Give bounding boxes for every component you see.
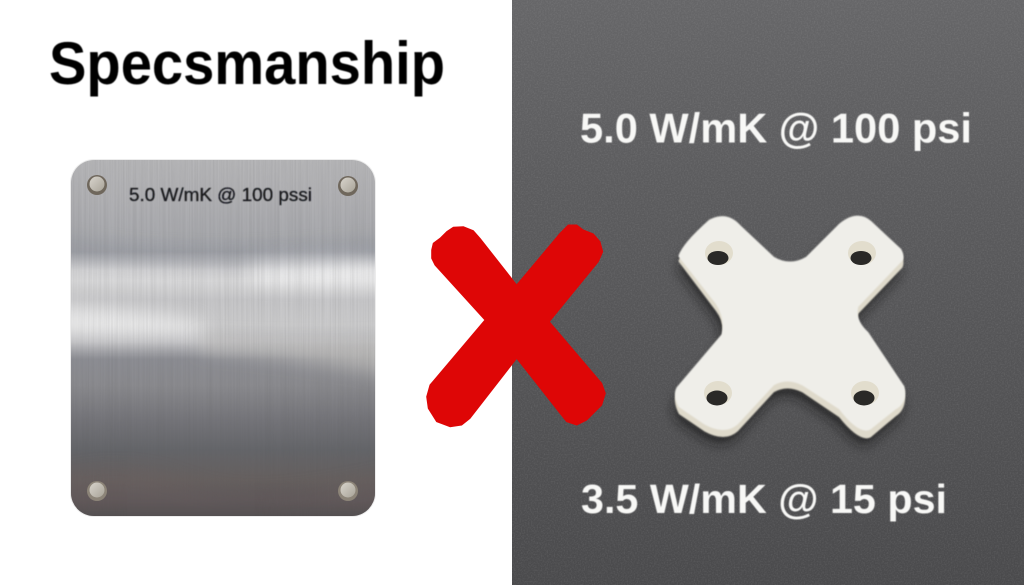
icon: white cross shaped thermal pad xyxy=(674,217,904,445)
icon: rivet bottom right xyxy=(338,481,358,501)
pad hole bottom right xyxy=(851,381,879,406)
panel: right dark textured background xyxy=(512,0,1024,585)
icon: rivet bottom left xyxy=(87,481,107,501)
title: Specsmanship xyxy=(49,30,445,97)
panel: left white background xyxy=(0,0,512,585)
icon: red X mark xyxy=(427,225,605,427)
icon: rivet top left xyxy=(87,175,107,195)
pad hole bottom left xyxy=(704,381,732,406)
icon: rivet top right xyxy=(338,176,358,196)
heading: claimed spec: 5.0 W/mK @ 100 psi xyxy=(580,104,972,152)
pad hole top left xyxy=(705,241,733,265)
pad hole top right xyxy=(848,241,876,265)
heading: real spec: 3.5 W/mK @ 15 psi xyxy=(581,476,947,522)
plate label text: 5.0 W/mK @ 100 pssi xyxy=(129,184,312,205)
panel: brushed metal plate xyxy=(70,159,376,517)
